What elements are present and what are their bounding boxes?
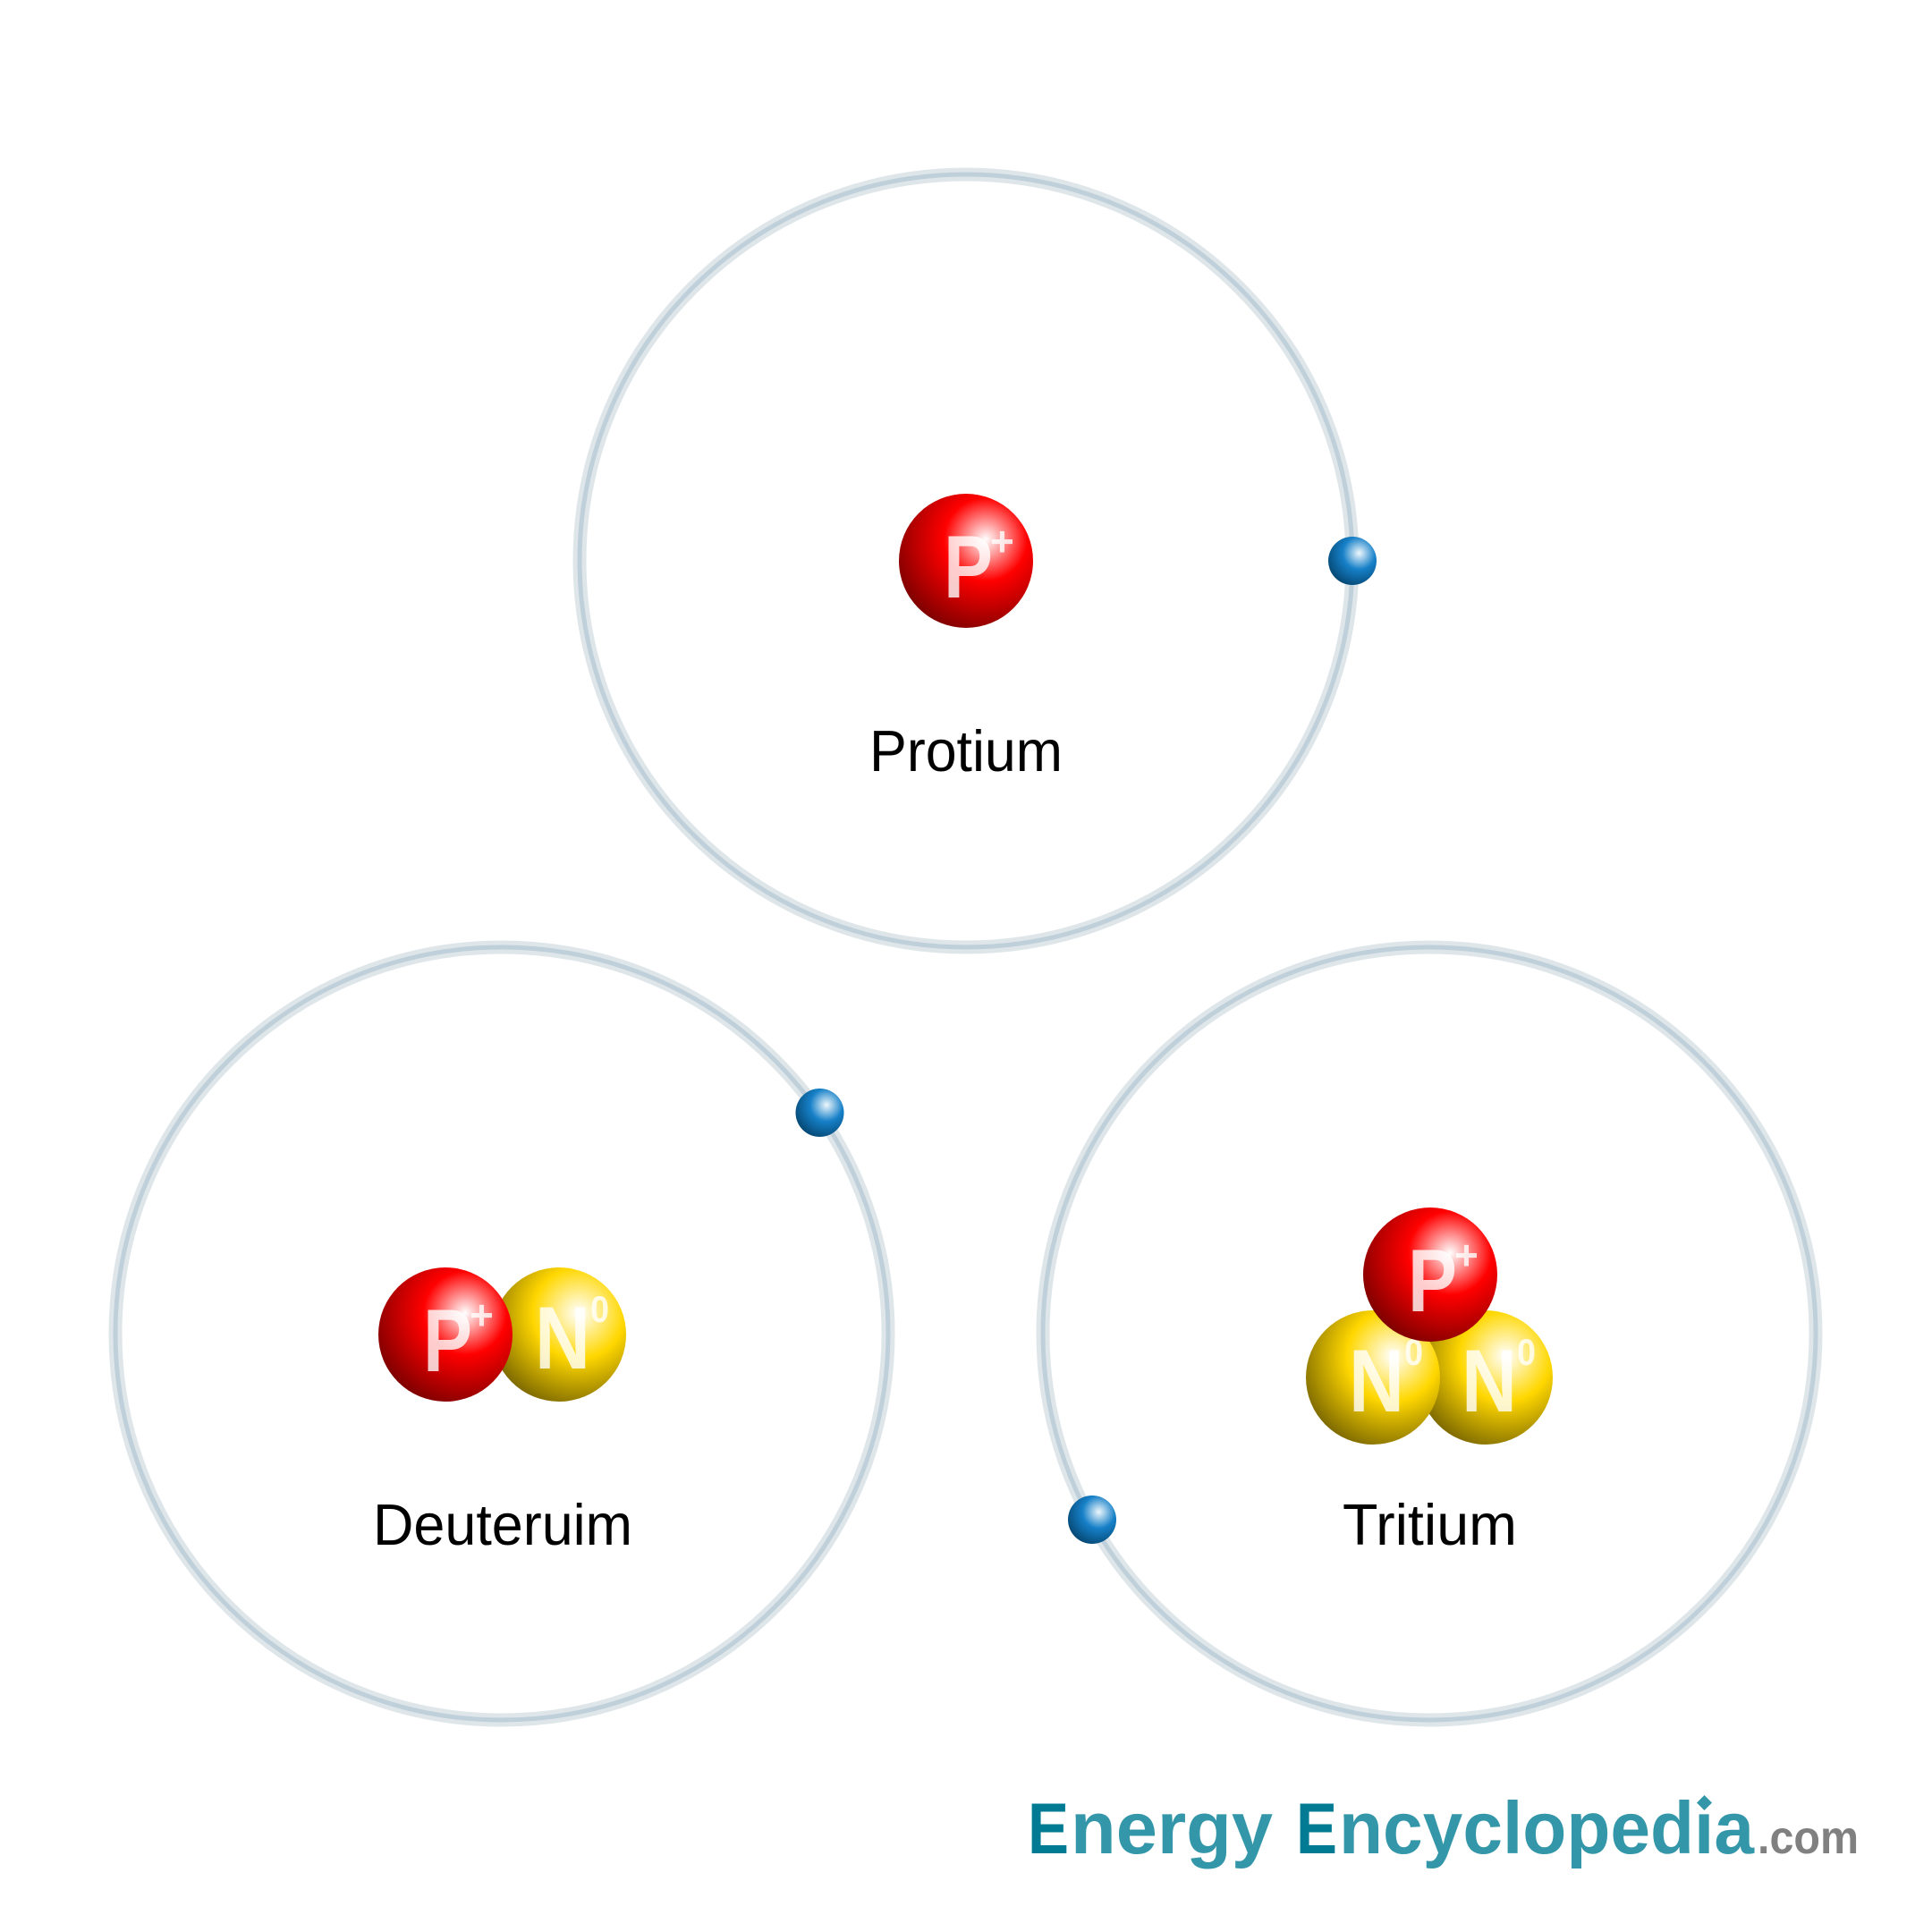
panel: tritium atom [1043,947,1816,1720]
label: Deuteruim: Deuteruim [373,1492,632,1557]
neutron right [1419,1310,1553,1445]
proton [899,494,1033,628]
label: Tritium: Tritium [1343,1492,1517,1557]
orbit ring [1043,947,1816,1720]
neutron [492,1267,626,1402]
neutron: 0 [590,1288,609,1330]
neutron left: 0 [1404,1331,1423,1373]
neutron left: N [1349,1331,1404,1430]
proton [378,1267,513,1402]
neutron left [1306,1310,1440,1445]
label: Protium: Protium [869,718,1063,784]
logo: Energy Encyclopedia.com: ncyclopedia [1339,1786,1755,1869]
proton: P [944,517,993,616]
proton: + [1454,1232,1479,1278]
logo: Energy Encyclopedia.com: nergy [1071,1786,1273,1869]
logo: Energy Encyclopedia.com: .com [1758,1812,1859,1864]
neutron right: N [1462,1331,1517,1430]
proton [1363,1208,1497,1342]
neutron: N [535,1288,590,1387]
orbit ring [580,174,1352,947]
electron [1068,1496,1116,1544]
electron [796,1089,844,1137]
logo: Energy Encyclopedia.com [1032,1795,1857,1869]
panel: protium atom [580,174,1377,947]
proton: P [1408,1231,1457,1330]
proton: P [423,1291,472,1390]
orbit ring [115,947,888,1720]
logo: Energy Encyclopedia.com: E [1028,1789,1069,1869]
proton: + [990,518,1014,564]
logo: Energy Encyclopedia.com: E [1296,1789,1337,1869]
panel: deuterium atom [115,947,888,1720]
neutron right: 0 [1517,1331,1536,1373]
electron [1328,537,1377,585]
proton: + [470,1292,494,1338]
